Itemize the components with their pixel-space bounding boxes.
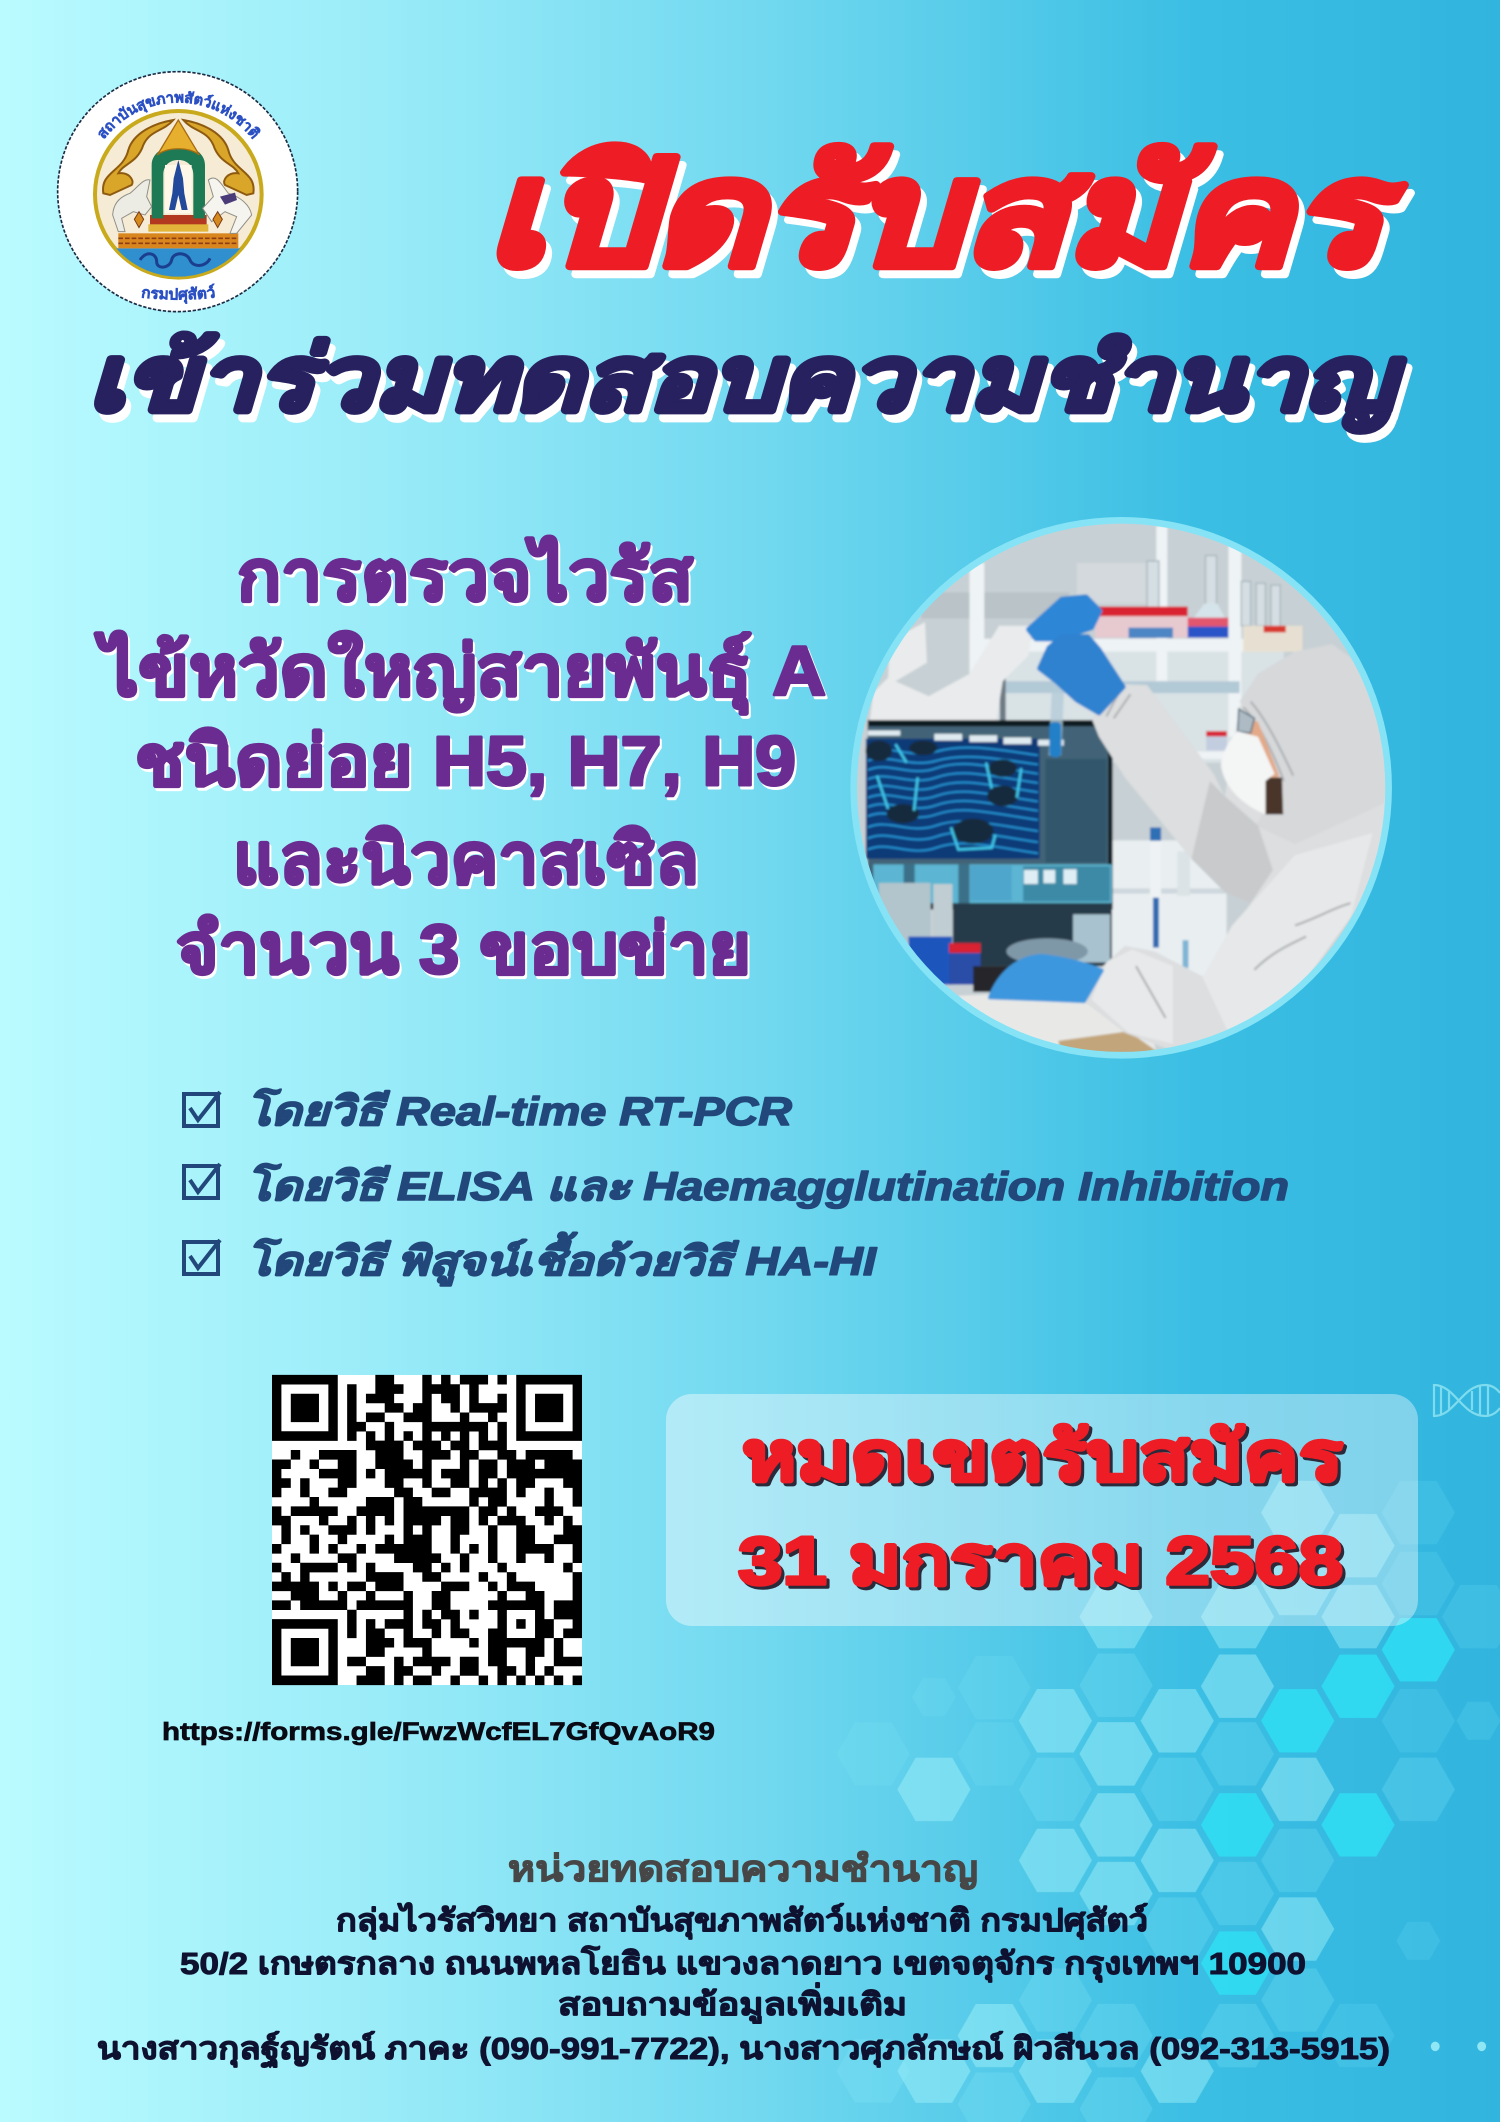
item: ELISA and HI: โดยวิธี ELISA และ Haemagglutination Inhibition — [246, 1162, 1289, 1209]
test description: ชนิดย่อย H5, H7, H9 — [135, 722, 796, 800]
logo text: institute name: สถาบันสุขภาพสัตว์แห่งชาติ — [98, 90, 260, 140]
test description — [94, 535, 826, 988]
face, mask and goggles — [1246, 720, 1280, 780]
photo wall — [857, 524, 1354, 1050]
panel: application deadline: 31 มกราคม 2568 — [738, 1523, 1343, 1599]
decorative dots — [1431, 2042, 1486, 2051]
hexagon pattern — [837, 1481, 1500, 2122]
background colleague — [870, 622, 1032, 726]
desk equipment — [953, 903, 1112, 966]
logo text: department: กรมปศุสัตว์ — [142, 283, 215, 304]
footer: contact information: สอบถามข้อมูลเพิ่มเติม — [558, 1982, 907, 2024]
monitor — [868, 720, 1113, 910]
blue test tube — [1047, 692, 1065, 756]
test description: การตรวจไวรัส — [237, 535, 693, 615]
logo: National Institute of Animal Health — [56, 70, 298, 312]
footer: contact information: นางสาวกุลฐ์ญรัตน์ ภาคะ (090-991-7722), นางสาวศุภลักษณ์ ผิวสีนวล (092-313-5915) — [97, 2031, 1390, 2069]
footer: contact information: หน่วยทดสอบความชำนาญ — [508, 1848, 978, 1890]
test description: จำนวน 3 ขอบข่าย — [176, 910, 751, 988]
footer: contact information — [97, 1848, 1390, 2069]
lower cabinet — [1112, 840, 1227, 977]
panel: application deadline: หมดเขตรับสมัคร — [742, 1419, 1344, 1495]
desk — [958, 994, 1156, 1050]
blue gloves — [1040, 637, 1123, 713]
test description: ไข้หวัดใหญ่สายพันธุ์ A — [94, 630, 826, 715]
footer: contact information: กลุ่มไวรัสวิทยา สถาบันสุขภาพสัตว์แห่งชาติ กรมปศุสัตว์ — [336, 1902, 1148, 1940]
icon: DNA helix — [1434, 1384, 1500, 1417]
subtitle: join the proficiency test: เข้าร่วมทดสอบความชำนาญ — [88, 330, 1405, 432]
title: open for application: เปิดรับสมัคร — [486, 133, 1404, 295]
QR code — [272, 1375, 582, 1685]
logo emblem — [90, 111, 267, 278]
panel: application deadline — [666, 1394, 1418, 1626]
QR link: https://forms.gle/FwzWcfEL7GfQvAoR9 — [162, 1718, 715, 1746]
item: Real-time RT-PCR: โดยวิธี Real-time RT-PCR — [246, 1087, 792, 1134]
protective suit — [1087, 684, 1385, 1048]
photo: scientist in a laboratory — [850, 517, 1392, 1059]
footer: contact information: 50/2 เกษตรกลาง ถนนพหลโยธิน แขวงลาดยาว เขตจตุจักร กรุงเทพฯ 10900 — [180, 1945, 1306, 1983]
item: HA-HI: โดยวิธี พิสูจน์เชื้อด้วยวิธี HA-HI — [246, 1231, 877, 1287]
lab shelves — [968, 526, 1244, 760]
item: HA-HI — [184, 1231, 877, 1287]
test description: และนิวคาสเซิล — [233, 820, 699, 898]
checklist — [184, 1087, 1289, 1287]
glassware — [1147, 555, 1280, 628]
